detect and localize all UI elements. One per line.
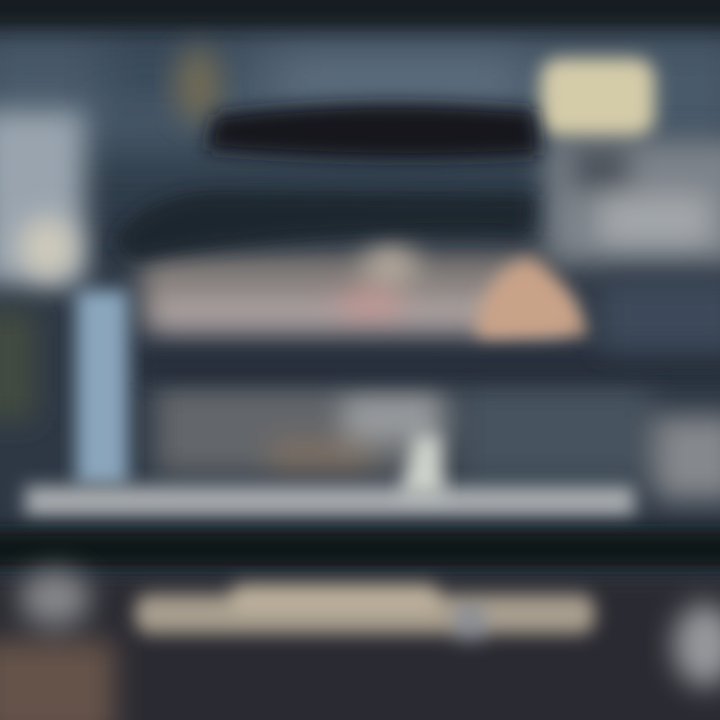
lower shelf contents xyxy=(155,385,720,500)
bright spot xyxy=(400,435,445,495)
upper wall xyxy=(0,30,720,210)
dark band mid xyxy=(140,350,720,382)
beige bottom shelf xyxy=(135,584,595,640)
beige shelf contents xyxy=(140,240,570,334)
cream light top right xyxy=(540,58,655,136)
upper black shelf xyxy=(205,104,540,159)
top dark band xyxy=(0,0,720,28)
right grey panel xyxy=(545,140,720,265)
blue column left xyxy=(76,290,128,485)
pale lower shelf xyxy=(25,486,635,516)
pale glow left xyxy=(18,216,78,280)
bottom area xyxy=(0,578,720,720)
left pale panel xyxy=(0,110,85,285)
black band xyxy=(0,530,720,568)
curved dark shelf xyxy=(115,192,535,262)
right dark blue area xyxy=(600,280,720,350)
bottom left objects xyxy=(0,570,115,720)
gold accent top xyxy=(174,47,222,123)
peach highlight xyxy=(475,258,590,340)
bottom right object xyxy=(673,603,720,687)
dark left patch xyxy=(0,310,35,420)
